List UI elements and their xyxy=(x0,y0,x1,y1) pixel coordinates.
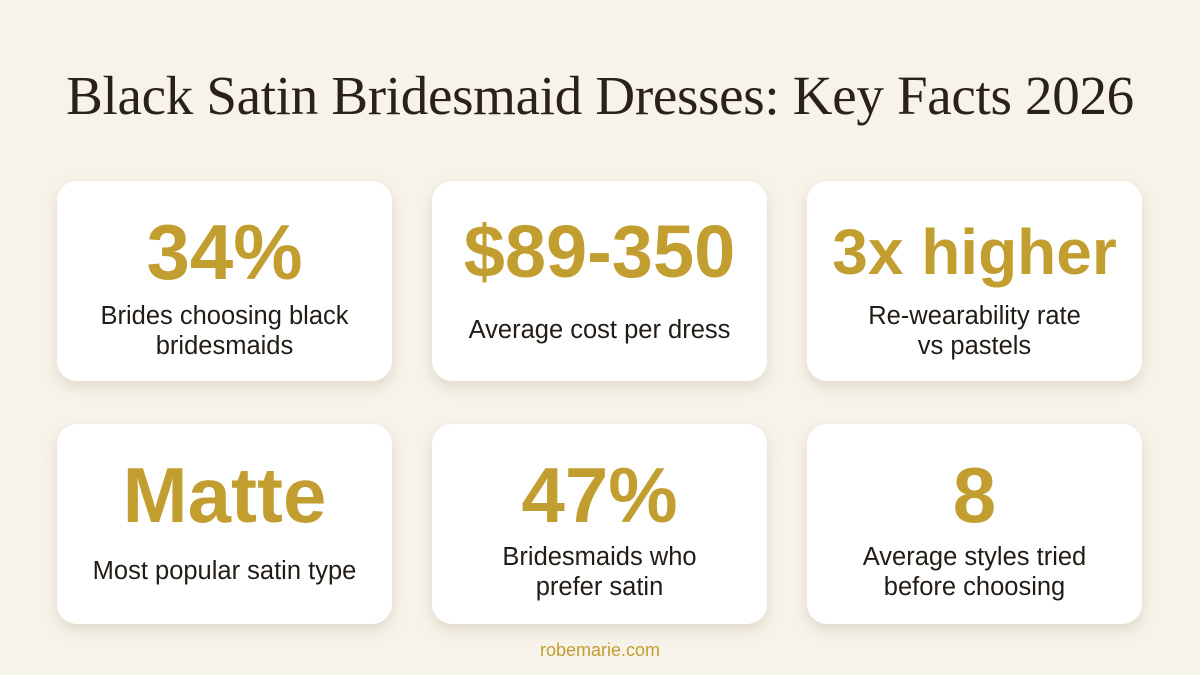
stat label: Average styles tried xyxy=(863,543,1086,571)
title: Black Satin Bridesmaid Dresses: Key Facts 2026 xyxy=(66,65,1134,126)
stat label: before choosing xyxy=(884,573,1065,601)
card: 8 styles xyxy=(807,424,1142,624)
card: cost xyxy=(432,181,767,381)
stat label: Most popular satin type xyxy=(93,557,356,585)
stat label: Brides choosing black xyxy=(100,302,349,330)
stat label xyxy=(862,543,1086,601)
stat label xyxy=(502,543,697,601)
stat number: 34% xyxy=(146,208,303,296)
stat number: 8 xyxy=(953,451,996,539)
card: 34% xyxy=(57,181,392,381)
stat number: $89-350 xyxy=(464,210,735,293)
footer source: robemarie.com xyxy=(540,640,660,660)
card: matte xyxy=(57,424,392,624)
stat label: Bridesmaids who xyxy=(502,543,697,571)
stat label xyxy=(868,302,1081,360)
stat number: 3x higher xyxy=(832,216,1117,288)
stat label: bridesmaids xyxy=(156,332,293,360)
stat label: prefer satin xyxy=(536,573,663,601)
card: re-wearability xyxy=(807,181,1142,381)
stat number: 47% xyxy=(521,451,678,539)
card: 47% xyxy=(432,424,767,624)
stat label xyxy=(100,302,349,360)
stat number: Matte xyxy=(123,451,326,539)
stat label: Re-wearability rate xyxy=(868,302,1081,330)
stat label: vs pastels xyxy=(918,332,1031,360)
stat label: Average cost per dress xyxy=(469,316,730,344)
